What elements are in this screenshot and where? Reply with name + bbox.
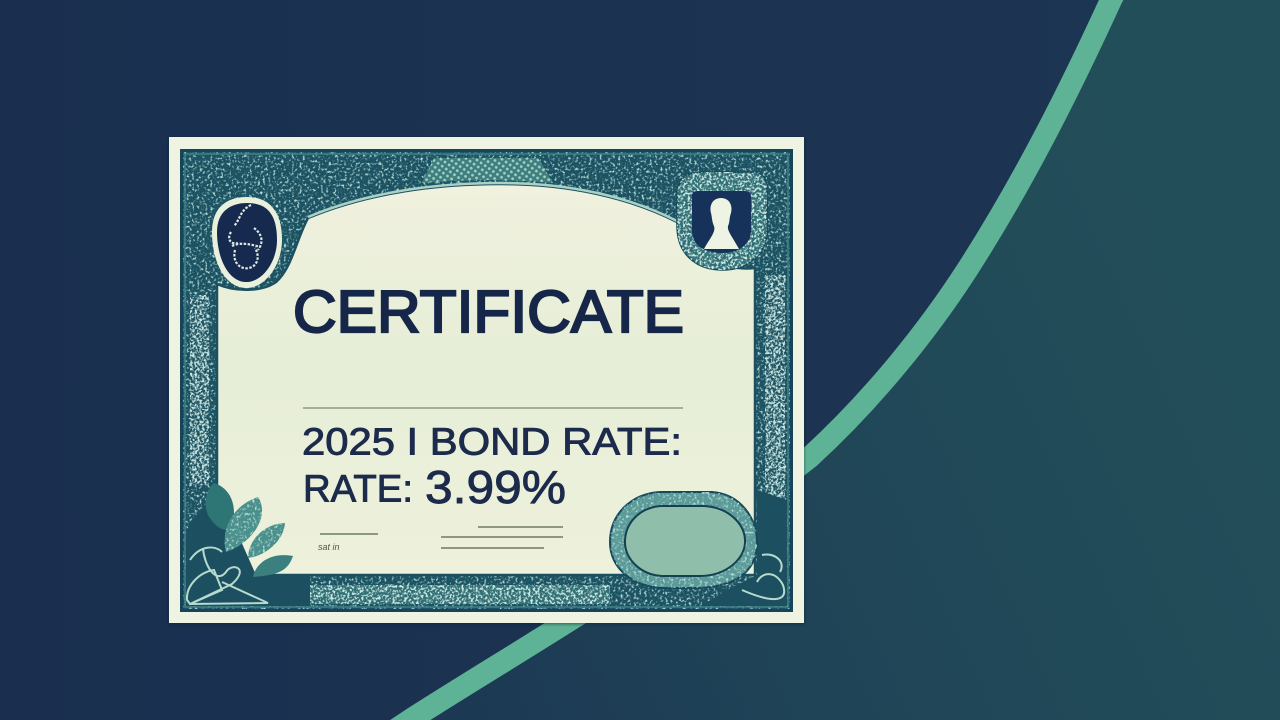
right border ornament strip bbox=[765, 275, 785, 505]
panel arc highlight bbox=[308, 183, 677, 221]
signature line left: sat in bbox=[318, 542, 340, 552]
foliage knot lines bbox=[187, 547, 268, 604]
rate text bbox=[302, 422, 682, 513]
ornamental border bbox=[180, 149, 793, 612]
left foliage bbox=[186, 483, 310, 606]
rate text: 2025 I BOND RATE: bbox=[302, 422, 682, 464]
left border ornament strip bbox=[190, 295, 209, 485]
heading: CERTIFICATE bbox=[293, 279, 684, 345]
background teal region under curve bbox=[410, 0, 1280, 720]
hatched crest at top of border bbox=[422, 158, 553, 183]
certificate paper bbox=[169, 137, 804, 623]
rate text: 3.99% bbox=[425, 461, 566, 513]
lower-right corner scroll bbox=[700, 490, 787, 606]
signature line left bbox=[318, 534, 378, 552]
rising green curve bbox=[395, 0, 1116, 720]
signature lines right bbox=[441, 527, 563, 548]
silhouette bust bbox=[704, 198, 739, 249]
left medallion bbox=[212, 197, 282, 288]
bottom border lettering band bbox=[310, 585, 610, 604]
divider rule bbox=[303, 407, 683, 409]
right medallion bbox=[677, 172, 767, 270]
oval seal bbox=[610, 492, 757, 588]
rate text: RATE: bbox=[303, 468, 413, 510]
certificate bbox=[169, 137, 804, 623]
medallion beaded figure bbox=[229, 205, 261, 268]
inner panel bbox=[217, 184, 755, 575]
